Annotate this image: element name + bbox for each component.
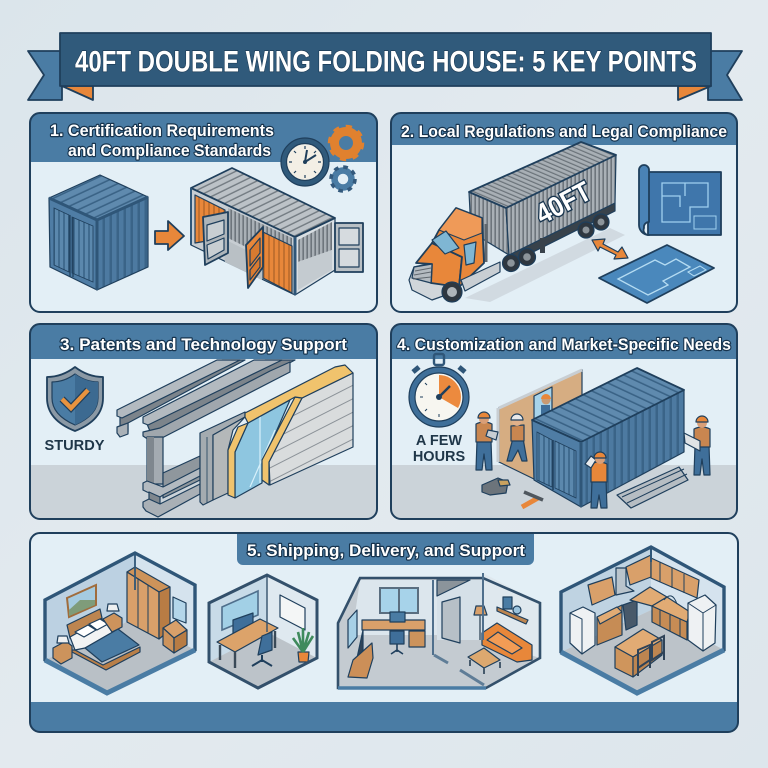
label: sturdy: STURDY [44,438,105,454]
label: a few hours: HOURS [413,449,466,465]
panel frame [30,324,377,519]
panel 1: certification [30,113,377,312]
tools [482,478,543,507]
icon: double arrow [592,239,628,259]
heading: 2. Local Regulations and Legal Compliance [401,122,727,141]
workers behind [476,394,551,470]
icon: shield [47,367,103,431]
ribbon tail: left [28,51,93,100]
heading: 4. Customization and Market-Specific Needs [397,335,731,354]
room: bedroom [45,553,195,693]
icon: floor plan sheet [599,245,714,303]
room: office [209,575,317,688]
heading [50,121,274,160]
heading: 1. Certification Requirements [50,121,274,140]
panel 5: shipping and delivery [30,533,738,732]
open container with wings [191,168,363,295]
icon: blueprint roll [639,165,721,235]
room: kitchen [561,547,724,693]
banner body [60,33,711,86]
panel frame [30,113,377,312]
steel beams [117,360,295,517]
panel 4: customization [391,324,737,519]
panel frame [391,324,737,519]
worker with laptop [684,416,710,475]
room: open plan living [338,573,540,688]
icon: orange gear [330,127,362,159]
icon: blue gear [331,167,355,191]
panel frame [391,113,737,312]
ribbon tail: right [678,51,742,100]
panel 2: regulations [391,113,737,312]
blue container [532,368,684,507]
worker in window [541,394,551,417]
closed blue container [49,175,148,290]
workers in front [585,416,710,508]
wall section [200,365,353,505]
lumber stack [617,467,688,508]
label: a few hours [413,433,466,465]
icon: clock [281,138,329,186]
worker inside [507,414,527,461]
heading tab [237,534,534,565]
arrow [155,221,184,250]
panel 3: patents and technology [30,324,377,519]
heading: and Compliance Standards [68,141,271,160]
label: 40FT: 40FT [530,175,596,230]
panel frame [30,533,738,732]
heading tab: 5. Shipping, Delivery, and Support [247,541,525,560]
icon: stopwatch [409,354,469,427]
worker at door [585,452,607,508]
wall panel [498,370,582,480]
heading: 3. Patents and Technology Support [60,335,347,354]
wheels [442,214,609,302]
worker with tablet [476,412,498,470]
truck cab [409,208,500,300]
title banner [28,33,742,100]
truck with 40ft container [409,142,625,302]
label: a few hours: A FEW [416,433,462,449]
